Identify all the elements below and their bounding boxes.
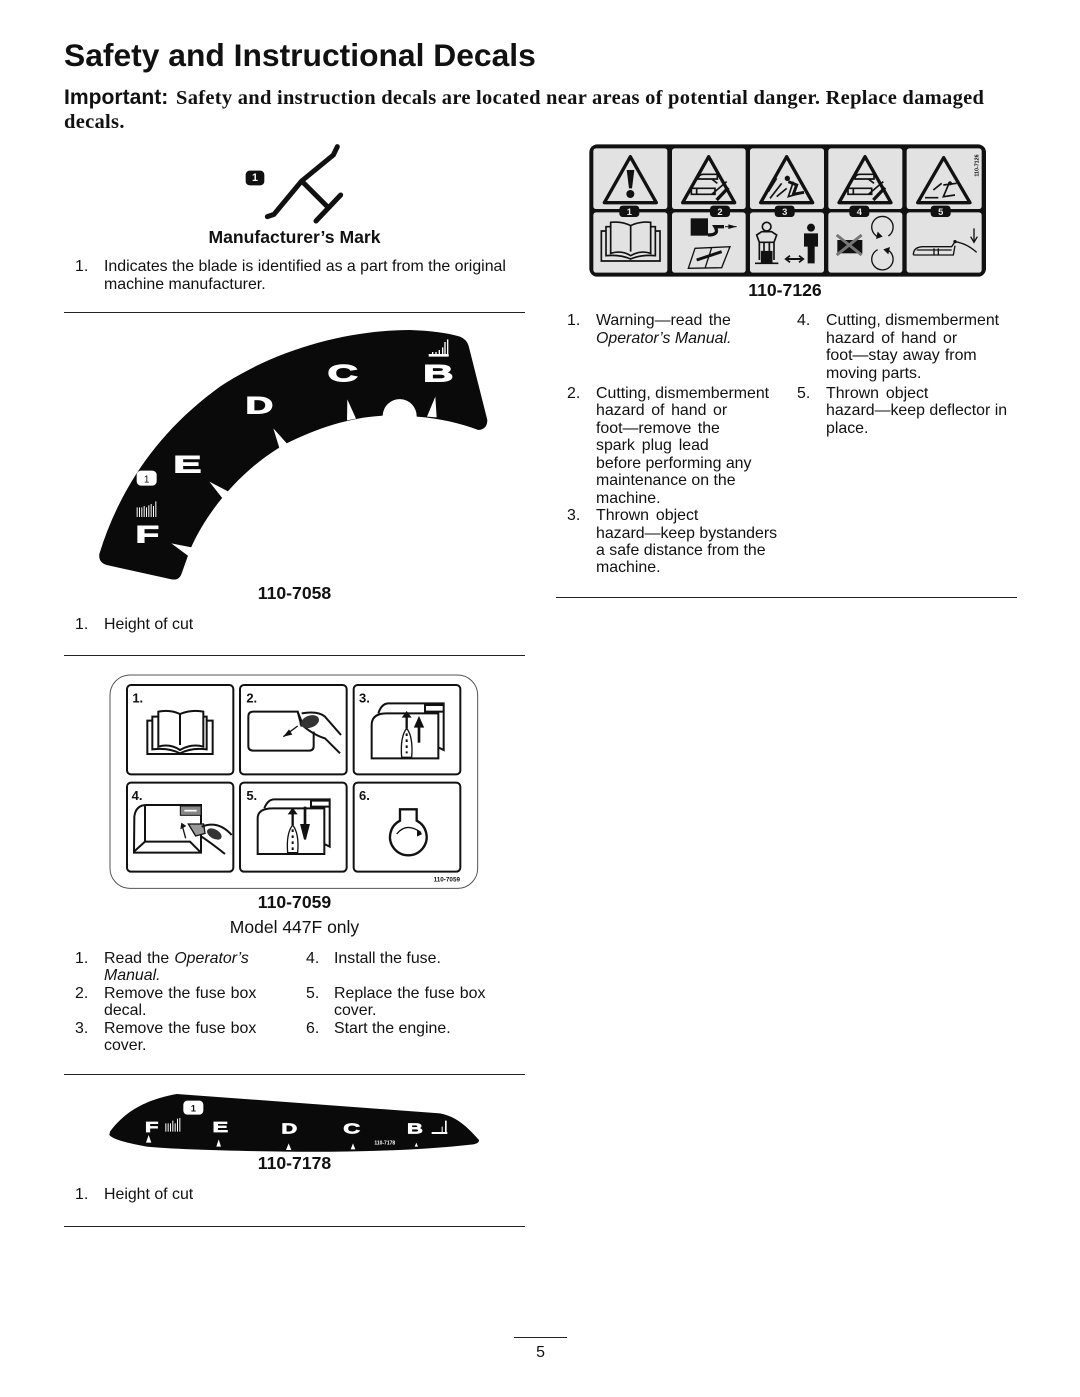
text: manufacturer's mark list: Indicates the blade is identified as a part from the original	[104, 258, 506, 275]
instruction decal 110-7059: 110-7059	[434, 877, 460, 884]
text: 110-7126 list left: maintenance on the	[596, 472, 736, 489]
height of cut decal 110-7178	[109, 1094, 479, 1152]
text: 110-7126 list right: Thrown object	[826, 385, 928, 402]
text: 110-7126 list left: 3.	[567, 507, 580, 524]
icon: deflector	[913, 228, 977, 255]
text: 110-7059 list left: 3.	[75, 1020, 88, 1037]
text: 110-7059 list right: Install the fuse.	[334, 950, 441, 967]
text: 110-7059 list right: 5.	[306, 985, 319, 1002]
text: 110-7126 list left	[567, 312, 777, 576]
safety decal 110-7126: 4	[857, 207, 863, 217]
text: 110-7058 list: Height of cut	[104, 616, 193, 633]
text: 110-7126 list left: machine.	[596, 559, 660, 576]
text: 110-7059 list left: cover.	[104, 1037, 146, 1054]
icon: fuse box cover replace	[258, 799, 330, 854]
safety decal 110-7126: 1	[627, 207, 632, 217]
safety decal 110-7126: 2	[717, 207, 723, 217]
icon: spark plug and wrench book	[688, 218, 737, 268]
icon: hazard pictograms	[691, 174, 957, 198]
text: 110-7126 list right: moving parts.	[826, 365, 921, 382]
height of cut decal 110-7178: 110-7178	[374, 1141, 395, 1147]
text: 110-7126 list left: hazard of hand or	[596, 402, 727, 419]
intro paragraph: decals.	[64, 111, 125, 133]
text: 110-7126 list right: hazard of hand or	[826, 330, 957, 347]
intro paragraph: Safety and instruction decals are located near areas of potential danger. Replace damaged	[176, 87, 984, 109]
icon: fuse box cover lift	[372, 703, 444, 758]
text: 110-7178 list: Height of cut	[104, 1186, 193, 1203]
text: 110-7126 list left: hazard—keep bystanders	[596, 525, 777, 542]
text: 110-7126 list right: 4.	[797, 312, 810, 329]
text: 110-7126 list left: Cutting, dismemberment	[596, 385, 769, 402]
text: 110-7126 list left: a safe distance from the	[596, 542, 766, 559]
gauge decal 110-7058: E	[173, 452, 201, 478]
text: 110-7126 list left: Operator’s Manual.	[596, 330, 731, 347]
text: 110-7126 list right: 5.	[797, 385, 810, 402]
text: 110-7126 list right: Cutting, dismemberment	[826, 312, 999, 329]
text: 110-7126 list left: 1.	[567, 312, 580, 329]
text: 110-7126 list left: spark plug lead	[596, 437, 709, 454]
safety decal 110-7126: 3	[782, 207, 787, 217]
text: 110-7059 list left: 2.	[75, 985, 88, 1002]
text: 110-7126 list left: Warning—read the	[596, 312, 731, 329]
title: Safety and Instructional Decals	[64, 37, 536, 73]
instruction decal 110-7059: 6.	[359, 788, 370, 803]
page number: 5	[536, 1344, 545, 1361]
safety decal 110-7126	[589, 144, 986, 277]
heading: 110-7126: 110-7126	[748, 280, 822, 300]
icon: book	[147, 711, 213, 754]
text: 110-7059 list right	[306, 950, 486, 1037]
text: 110-7126 list left: 2.	[567, 385, 580, 402]
number badges	[619, 206, 951, 217]
text: 110-7059 list left: decal.	[104, 1002, 146, 1019]
icon: bystander distance	[755, 222, 818, 263]
page number	[514, 1337, 567, 1362]
text: 110-7059 list right: 4.	[306, 950, 319, 967]
gauge decal 110-7058: F	[136, 521, 159, 548]
text: 110-7126 list left: machine.	[596, 490, 660, 507]
text: 110-7126 list left: Thrown object	[596, 507, 698, 524]
instruction decal 110-7059: 3.	[359, 691, 370, 706]
height of cut decal 110-7178: E	[213, 1119, 228, 1136]
text: 110-7059 list left: Manual.	[104, 967, 161, 984]
text: 110-7126 list right: foot—stay away from	[826, 347, 977, 364]
text: 110-7059 list left: Remove the fuse box	[104, 1020, 256, 1037]
text: manufacturer's mark list: 1.	[75, 258, 88, 275]
gauge decal 110-7058: 1	[144, 475, 150, 486]
height of cut decal 110-7178: 1	[191, 1104, 196, 1114]
instruction decal 110-7059	[110, 674, 478, 889]
heading: 110-7059: 110-7059	[258, 892, 331, 912]
text: 110-7126 list left: before performing any	[596, 455, 751, 472]
gauge decal 110-7058	[99, 330, 488, 580]
instruction decal 110-7059: 1.	[132, 691, 143, 706]
text: manufacturer's mark list	[75, 258, 506, 293]
text: 110-7126 list right: hazard—keep deflector in	[826, 402, 1007, 419]
gauge decal 110-7058: C	[328, 361, 358, 387]
text: 110-7059 list right: cover.	[334, 1002, 376, 1019]
text: 110-7059 list left: 1.	[75, 950, 88, 967]
icon: fuse install	[134, 805, 232, 854]
text: 110-7058 list: 1.	[75, 616, 88, 633]
intro paragraph	[64, 86, 984, 133]
icon: hand stay away from rotating parts	[837, 216, 893, 270]
text: 110-7059 list left: Remove the fuse box	[104, 985, 256, 1002]
text: 110-7059 list right: Replace the fuse box	[334, 985, 485, 1002]
heading: manufacturer's mark: Manufacturer’s Mark	[208, 227, 381, 247]
text: 110-7126 list right	[797, 312, 1007, 437]
height of cut decal 110-7178: B	[407, 1120, 423, 1136]
height of cut decal 110-7178: F	[145, 1119, 158, 1135]
instruction decal 110-7059: 5.	[246, 788, 257, 803]
text: 110-7126 list left: foot—remove the	[596, 420, 720, 437]
icon: book	[601, 222, 660, 261]
heading: 110-7178: 110-7178	[258, 1153, 331, 1173]
icon: manufacturer's mark decal	[246, 144, 344, 224]
heading: 110-7058: 110-7058	[258, 583, 331, 603]
gauge decal 110-7058: B	[423, 361, 453, 387]
text: 110-7059 list left: Read the Operator’s	[104, 950, 249, 967]
icon: engine start key	[390, 809, 427, 855]
text: 110-7059 list right: Start the engine.	[334, 1020, 451, 1037]
instruction decal 110-7059: 4.	[132, 788, 143, 803]
gauge decal 110-7058: D	[245, 392, 273, 419]
height of cut decal 110-7178: C	[343, 1121, 360, 1137]
text: model note: Model 447F only	[230, 917, 359, 937]
text: manufacturer's mark list: machine manufacturer.	[104, 276, 266, 293]
safety decal 110-7126: 110-7126	[974, 154, 980, 177]
height of cut decal 110-7178: D	[281, 1120, 297, 1136]
intro paragraph: Important:	[64, 86, 168, 109]
text: 110-7126 list right: place.	[826, 420, 868, 437]
text: 110-7059 list left	[75, 950, 256, 1054]
instruction decal 110-7059: 2.	[246, 691, 257, 706]
text: 110-7059 list right: 6.	[306, 1020, 319, 1037]
text: 110-7178 list: 1.	[75, 1186, 88, 1203]
icon: warning exclamation	[626, 170, 634, 198]
safety decal 110-7126: 5	[938, 207, 943, 217]
icon: peel decal	[248, 712, 341, 753]
icon: manufacturer's mark decal: 1	[252, 172, 258, 184]
